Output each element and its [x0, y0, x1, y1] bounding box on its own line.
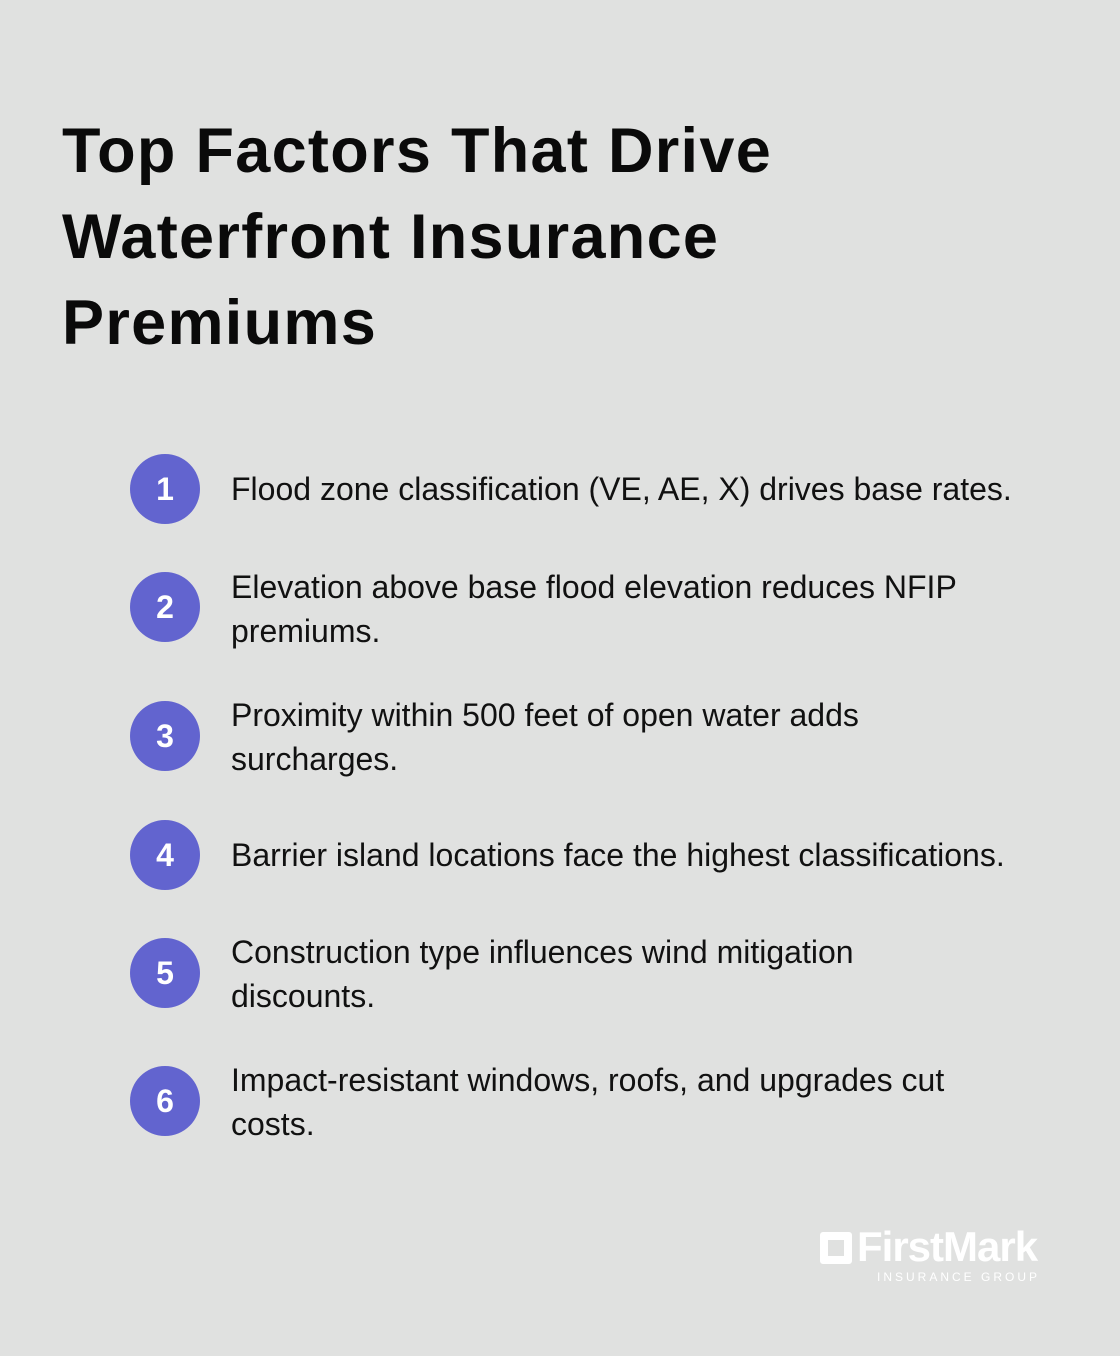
- logo: FirstMark: [857, 1223, 1037, 1270]
- title: Top Factors That Drive Waterfront Insurance Premiums: [62, 116, 772, 358]
- item 2: Elevation above base flood elevation reduces NFIP premiums.: [231, 569, 956, 649]
- item 5: Construction type influences wind mitigation discounts.: [231, 934, 854, 1014]
- item 4: 4: [156, 837, 174, 873]
- logo: [820, 1223, 1040, 1284]
- item 3: Proximity within 500 feet of open water adds surcharges.: [231, 697, 859, 777]
- item 6: Impact-resistant windows, roofs, and upgrades cut costs.: [231, 1062, 944, 1142]
- item 2: 2: [156, 589, 174, 625]
- item 5: 5: [156, 955, 174, 991]
- item 3: 3: [156, 718, 174, 754]
- logo: INSURANCE GROUP: [877, 1270, 1040, 1284]
- item 6: 6: [156, 1083, 174, 1119]
- item 4: Barrier island locations face the highest classifications.: [231, 837, 1005, 873]
- item 4: [130, 820, 1005, 890]
- item 1: [130, 454, 1012, 524]
- item 1: Flood zone classification (VE, AE, X) drives base rates.: [231, 471, 1012, 507]
- item 1: 1: [156, 471, 174, 507]
